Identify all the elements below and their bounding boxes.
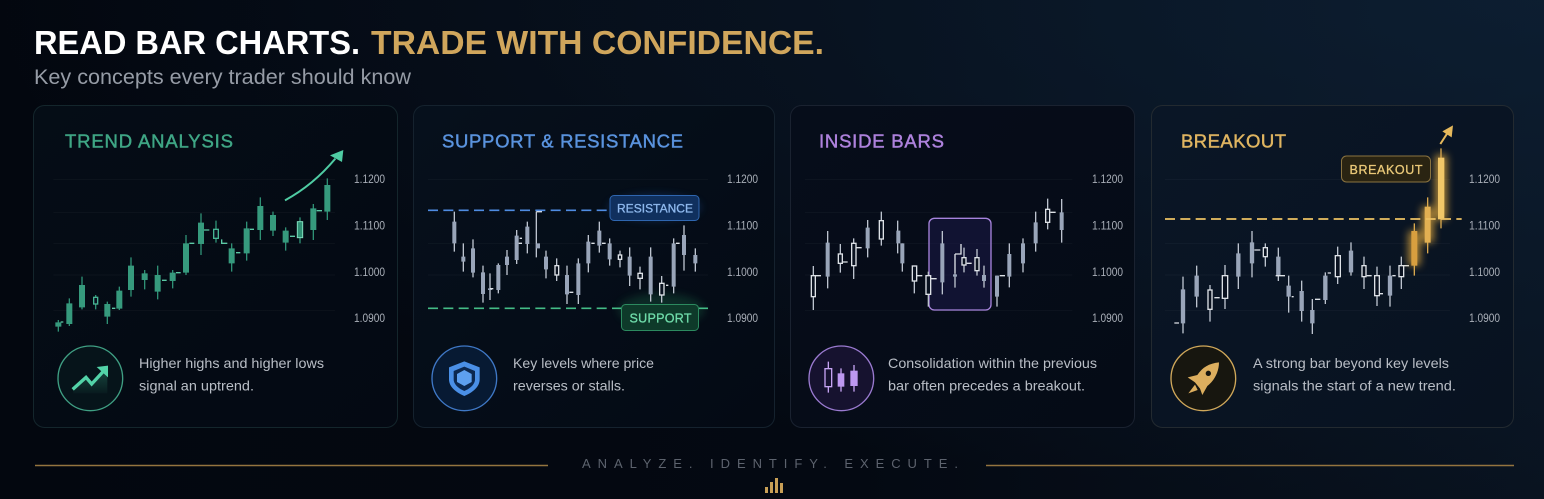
price axis	[1092, 174, 1123, 325]
price axis: 1.1000	[1469, 267, 1500, 279]
price axis	[354, 174, 385, 325]
icon: footer bars	[765, 478, 783, 493]
price axis: 1.1200	[1092, 174, 1123, 186]
resistance line	[428, 208, 610, 213]
label: resistance: RESISTANCE	[617, 202, 693, 216]
price axis: 1.1100	[1092, 220, 1123, 232]
icon: candles	[809, 346, 874, 411]
panel: support and resistance	[414, 106, 774, 428]
price axis: 1.1100	[1469, 220, 1500, 232]
title: READ BAR CHARTS.	[34, 24, 360, 61]
price axis: 1.0900	[727, 313, 758, 325]
heading: inside bars: INSIDE BARS	[819, 130, 944, 152]
candlestick chart: inside bars	[805, 179, 1072, 311]
subtitle: Key concepts every trader should know	[34, 66, 412, 89]
description: signal an uptrend.	[139, 378, 254, 394]
price axis: 1.1200	[354, 174, 385, 186]
heading: breakout: BREAKOUT	[1181, 130, 1286, 152]
support line	[428, 306, 708, 311]
panel: inside bars	[790, 106, 1134, 428]
price axis: 1.1100	[727, 220, 758, 232]
panel: breakout	[1152, 106, 1514, 428]
label: breakout	[1342, 156, 1430, 182]
description: reverses or stalls.	[513, 378, 625, 394]
price axis: 1.0900	[354, 313, 385, 325]
panel: trend analysis	[34, 106, 398, 428]
description: Higher highs and higher lows	[139, 355, 324, 371]
heading: trend analysis: TREND ANALYSIS	[65, 130, 233, 152]
breakout candles	[1411, 148, 1444, 276]
highlight box: inside bars	[929, 218, 991, 310]
description: signals the start of a new trend.	[1253, 378, 1456, 394]
price axis: 1.1100	[354, 220, 385, 232]
label: breakout: BREAKOUT	[1350, 163, 1423, 177]
icon: shield	[432, 346, 497, 411]
price axis: 1.1000	[727, 267, 758, 279]
price axis: 1.0900	[1469, 313, 1500, 325]
candlestick chart: breakout	[1165, 125, 1462, 334]
label: resistance	[610, 196, 699, 220]
price axis: 1.0900	[1092, 313, 1123, 325]
description: Key levels where price	[513, 355, 654, 371]
arrow: breakout	[1440, 125, 1453, 144]
price axis	[1469, 174, 1500, 325]
arrow: uptrend	[285, 150, 343, 200]
icon: trend up	[58, 346, 123, 411]
description: A strong bar beyond key levels	[1253, 355, 1449, 371]
price axis: 1.1000	[1092, 267, 1123, 279]
description: bar often precedes a breakout.	[888, 378, 1085, 394]
price axis: 1.1200	[1469, 174, 1500, 186]
title: TRADE WITH CONFIDENCE.	[371, 24, 824, 61]
footer rule: right	[986, 464, 1514, 466]
footer tagline: ANALYZE. IDENTIFY. EXECUTE.	[582, 456, 958, 471]
icon: rocket	[1171, 346, 1236, 411]
price axis: 1.1200	[727, 174, 758, 186]
breakout level line	[1165, 216, 1462, 221]
candlestick chart: uptrend	[53, 150, 343, 332]
description: Consolidation within the previous	[888, 355, 1097, 371]
footer rule: left	[35, 464, 548, 466]
price axis: 1.1000	[354, 267, 385, 279]
heading: support and resistance: SUPPORT & RESISTANCE	[442, 130, 683, 152]
price axis	[727, 174, 758, 325]
label: support	[622, 304, 698, 330]
label: support: SUPPORT	[630, 312, 692, 326]
candlestick chart: range	[428, 179, 708, 327]
